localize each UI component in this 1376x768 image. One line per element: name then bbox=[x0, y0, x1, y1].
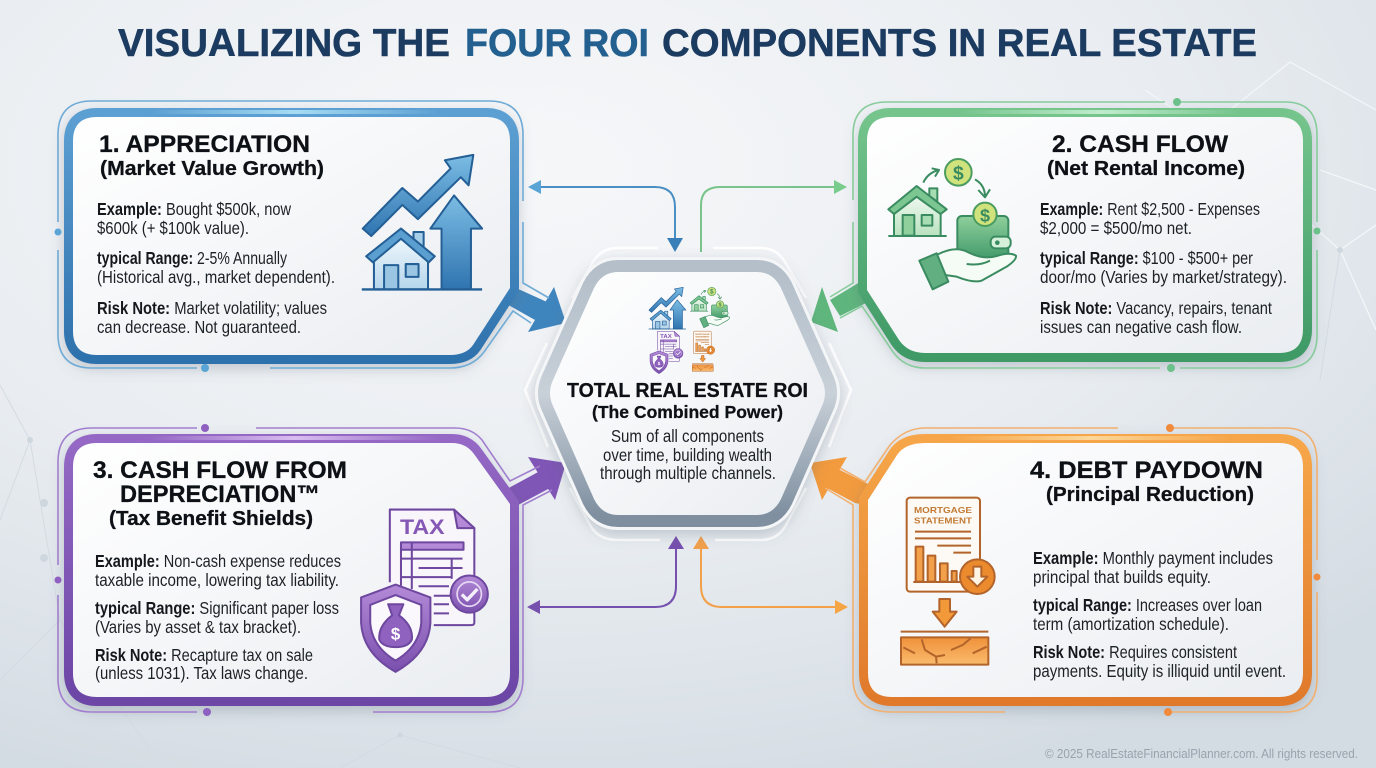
panel 4 details: principal that builds equity. bbox=[1033, 567, 1211, 587]
title bbox=[118, 22, 1257, 65]
panel 3 heading: (Tax Benefit Shields) bbox=[109, 508, 313, 530]
panel 1 heading bbox=[99, 131, 324, 180]
title: VISUALIZING THE bbox=[118, 22, 450, 65]
panel 2 details: typical Range: $100 - $500+ per bbox=[1040, 248, 1253, 268]
arrow: appreciation into total bbox=[505, 283, 566, 332]
panel 4 details bbox=[1033, 548, 1286, 681]
panel 2 details: $2,000 = $500/mo net. bbox=[1040, 218, 1192, 238]
panel 3 details: typical Range: Significant paper loss bbox=[95, 598, 339, 618]
panel 2 frame bbox=[867, 117, 1303, 353]
panel 2 details bbox=[1040, 199, 1287, 337]
panel 1 details: can decrease. Not guaranteed. bbox=[97, 317, 301, 337]
panel 3 heading: 3. CASH FLOW FROM bbox=[93, 457, 347, 484]
panel 3 details: taxable income, lowering tax liability. bbox=[95, 570, 339, 590]
hexagon heading: TOTAL REAL ESTATE ROI bbox=[567, 379, 808, 402]
panel 1: appreciation bbox=[54, 101, 549, 372]
panel 1 heading: 1. APPRECIATION bbox=[99, 131, 310, 158]
panel 2 details: Example: Rent $2,500 - Expenses bbox=[1040, 199, 1260, 219]
hexagon description: through multiple channels. bbox=[600, 463, 776, 483]
panel 1 details: typical Range: 2-5% Annually bbox=[97, 248, 287, 268]
panel 1 details bbox=[97, 199, 335, 337]
panel 4 frame bbox=[868, 443, 1303, 697]
panel 4 details: Example: Monthly payment includes bbox=[1033, 548, 1273, 568]
panel 2 heading bbox=[1047, 131, 1245, 180]
icon: mortgage statement and cracked foundation: MORTGAGE bbox=[914, 505, 973, 515]
panel 2 heading: 2. CASH FLOW bbox=[1052, 131, 1228, 158]
panel 3 heading bbox=[93, 457, 347, 530]
panel 1 details: Example: Bought $500k, now bbox=[97, 199, 291, 219]
panel 3 details bbox=[95, 551, 341, 683]
panel 4 heading bbox=[1030, 457, 1263, 506]
panel 3 details: Risk Note: Recapture tax on sale bbox=[95, 645, 313, 665]
panel 1 details: Risk Note: Market volatility; values bbox=[97, 298, 327, 318]
hexagon heading bbox=[567, 379, 808, 422]
panel 3 details: (unless 1031). Tax laws change. bbox=[95, 663, 308, 683]
mini icon: debt paydown bbox=[692, 331, 715, 371]
connector arrow: debt paydown to total bbox=[693, 536, 848, 614]
panel 3: cash flow from depreciation bbox=[54, 424, 552, 716]
panel 2 heading: (Net Rental Income) bbox=[1047, 158, 1245, 180]
panel 1 heading: (Market Value Growth) bbox=[100, 158, 324, 180]
hexagon description bbox=[600, 426, 776, 483]
icon: house, coin, wallet and hand: $ bbox=[980, 205, 990, 225]
icon: tax form with shield bbox=[361, 510, 488, 672]
title: COMPONENTS IN REAL ESTATE bbox=[662, 22, 1257, 65]
panel 1 details: (Historical avg., market dependent). bbox=[97, 267, 335, 287]
panel 4: debt paydown bbox=[825, 424, 1320, 716]
panel 2: cash flow bbox=[830, 98, 1320, 372]
panel 3 details: Example: Non-cash expense reduces bbox=[95, 551, 341, 571]
panel 3 heading: DEPRECIATION™ bbox=[120, 481, 320, 508]
icon: house, coin, wallet and hand bbox=[888, 159, 1016, 289]
arrow: cash flow into total bbox=[811, 276, 872, 332]
mini icon: cash flow bbox=[690, 287, 730, 328]
panel 4 details: payments. Equity is illiquid until event. bbox=[1033, 661, 1286, 681]
panel 3 details: (Varies by asset & tax bracket). bbox=[95, 617, 301, 637]
icon: tax form with shield: TAX bbox=[400, 516, 445, 539]
mini icon: depreciation bbox=[650, 331, 683, 374]
panel 2 details: issues can negative cash flow. bbox=[1040, 317, 1242, 337]
panel 4 heading: 4. DEBT PAYDOWN bbox=[1030, 457, 1263, 484]
hexagon description: over time, building wealth bbox=[603, 445, 772, 465]
connector arrow: total to cash flow bbox=[701, 180, 847, 252]
panel 4 heading: (Principal Reduction) bbox=[1046, 484, 1254, 506]
panel 4 details: term (amortization schedule). bbox=[1033, 614, 1229, 634]
panel 1 frame bbox=[73, 117, 510, 355]
hexagon outer guide lines bbox=[525, 248, 851, 540]
hexagon description: Sum of all components bbox=[611, 426, 764, 446]
hexagon heading: (The Combined Power) bbox=[592, 402, 783, 422]
panel 4 details: Risk Note: Requires consistent bbox=[1033, 642, 1237, 662]
title: FOUR ROI bbox=[465, 22, 649, 65]
mini icon: appreciation bbox=[649, 287, 686, 329]
panel 1 details: $600k (+ $100k value). bbox=[97, 218, 249, 238]
connector arrow: appreciation to total bbox=[528, 180, 683, 252]
icon: house, coin, wallet and hand: $ bbox=[953, 163, 964, 184]
icon: house with growth arrows bbox=[362, 155, 482, 289]
icon: tax form with shield: $ bbox=[391, 625, 401, 644]
icon: mortgage statement and cracked foundation: STATEMENT bbox=[914, 516, 972, 526]
arrow: debt paydown into total bbox=[810, 457, 872, 506]
panel 2 details: door/mo (Varies by market/strategy). bbox=[1040, 267, 1287, 287]
panel 3 frame bbox=[73, 443, 510, 697]
arrow: depreciation into total bbox=[505, 457, 566, 512]
connector arrow: depreciation to total bbox=[527, 536, 684, 614]
panel 2 details: Risk Note: Vacancy, repairs, tenant bbox=[1040, 298, 1272, 318]
hexagon body bbox=[550, 272, 825, 515]
panel 4 details: typical Range: Increases over loan bbox=[1033, 595, 1262, 615]
icon: mortgage statement and cracked foundation bbox=[901, 498, 995, 665]
center hexagon: total real estate ROI bbox=[525, 248, 851, 540]
